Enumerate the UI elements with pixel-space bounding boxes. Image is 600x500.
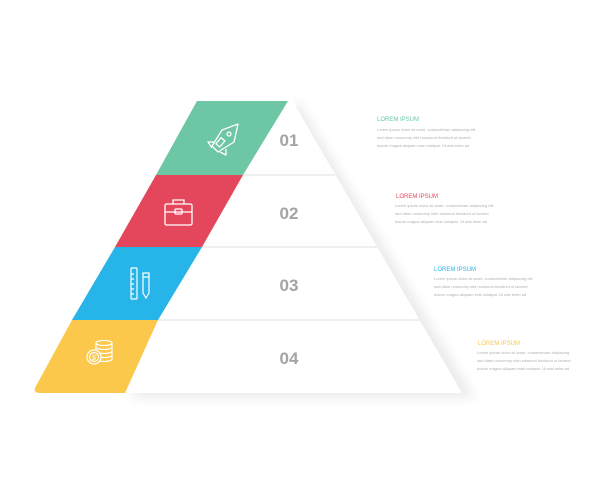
text block 3: Lorem ipsum dolor sit amet, consectetuer adipiscing elit (434, 276, 533, 281)
icon: rocket (208, 124, 238, 155)
tier 3 blue band (72, 247, 202, 320)
text block 3: dolore magna aliquam erat volutpat. Ut wisi enim ad (434, 292, 526, 297)
text block 4 (477, 341, 571, 371)
text block 1 (377, 117, 476, 148)
text block 1: sed diam nonummy nibh euismod tincidunt ut laoreet (377, 135, 471, 140)
text block 3: LOREM IPSUM (434, 267, 476, 273)
icon: ruler and pencil (131, 268, 149, 299)
text block 4: dolore magna aliquam erat volutpat. Ut wisi enim ad (477, 366, 569, 371)
text block 1: LOREM IPSUM (377, 117, 419, 123)
text block 2: sed diam nonummy nibh euismod tincidunt ut laoreet (395, 211, 489, 216)
text block 2 (395, 194, 494, 224)
number 04: 04 (280, 349, 299, 368)
number 02: 02 (280, 204, 298, 223)
text block 1: dolore magna aliquam erat volutpat. Ut wisi enim ad (377, 143, 469, 148)
pyramid: white body (125, 100, 462, 393)
text block 2: Lorem ipsum dolor sit amet, consectetuer adipiscing elit (395, 203, 494, 208)
text block 3 (434, 267, 533, 297)
tier 1 green band (156, 101, 288, 175)
icon: coins: $ (92, 355, 96, 362)
text block 4: sed diam nonummy nibh euismod tincidunt ut laoreet (477, 358, 571, 363)
tier 4 yellow band (35, 320, 158, 393)
tier 2 red band (115, 175, 243, 247)
pyramid shadow (130, 100, 475, 398)
number 01: 01 (280, 131, 298, 150)
text block 4: Lorem ipsum dolor sit amet, consectetuer adipiscing (477, 350, 569, 355)
text block 3: sed diam nonummy nibh euismod tincidunt ut laoreet (434, 284, 528, 289)
number 03: 03 (280, 276, 298, 295)
text block 2: dolore magna aliquam erat volutpat. Ut wisi enim ad (395, 219, 487, 224)
text block 4: LOREM IPSUM (478, 341, 520, 347)
icon: briefcase (165, 200, 192, 225)
text block 2: LOREM IPSUM (396, 194, 438, 200)
text block 1: Lorem ipsum dolor sit amet, consectetuer adipiscing elit (377, 127, 476, 132)
